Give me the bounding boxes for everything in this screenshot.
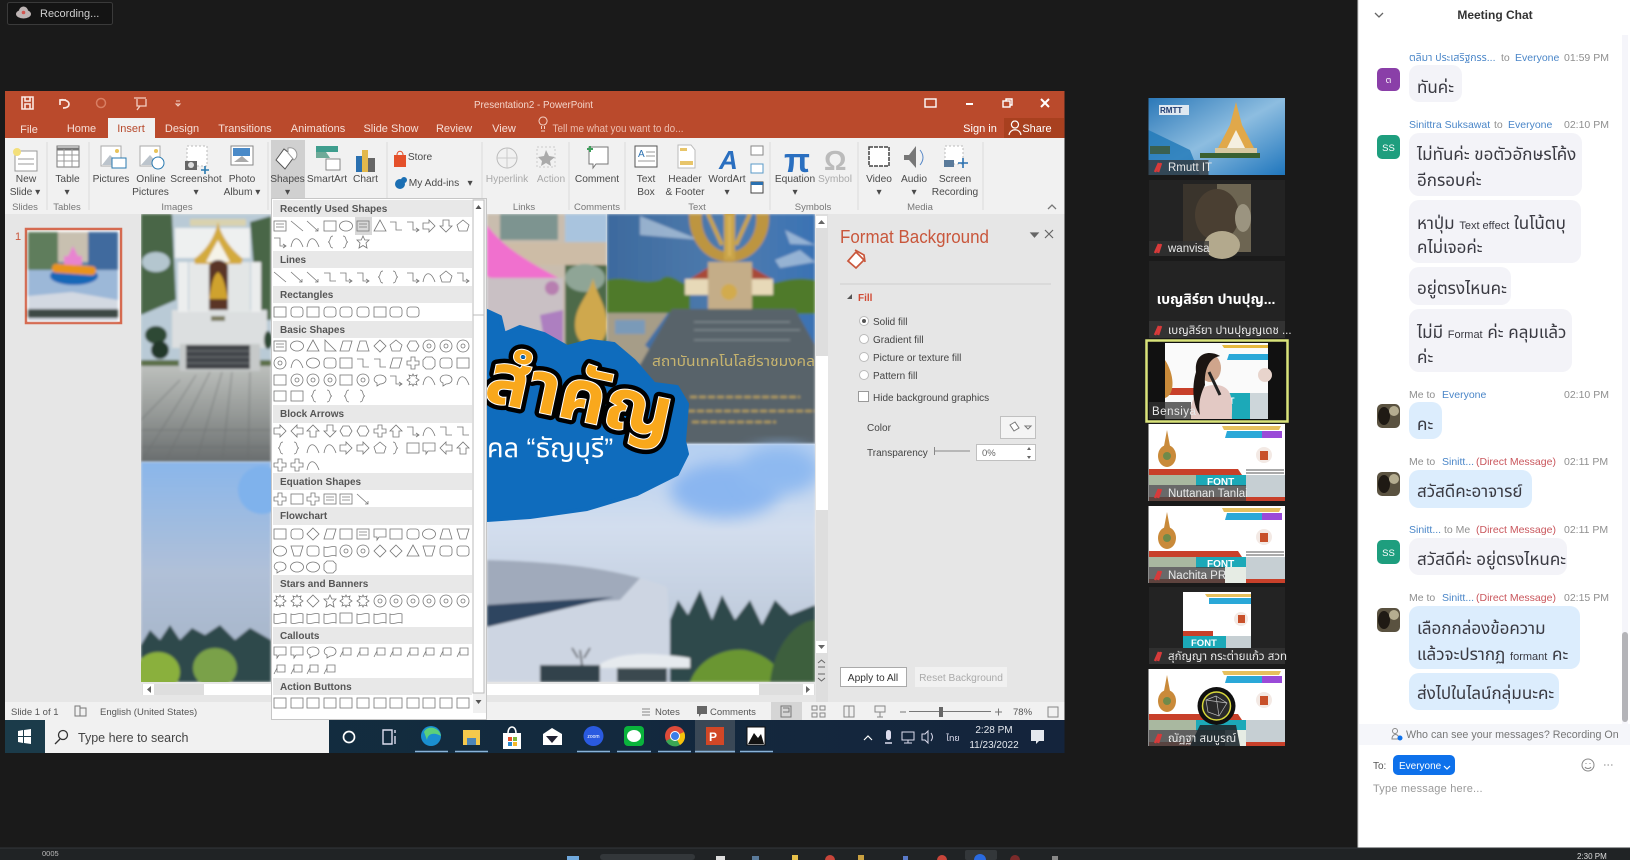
recording indicator xyxy=(8,2,112,24)
tile: small slide view: FONT xyxy=(1191,638,1217,649)
fill section: Fill xyxy=(858,293,873,304)
tile: active speaker Bensiya xyxy=(1146,340,1288,422)
button: Apply to All xyxy=(840,668,906,686)
status bar: English (United States) xyxy=(100,707,197,718)
ribbon group labels: Images xyxy=(161,202,193,213)
shapes gallery menu xyxy=(272,198,486,720)
ribbon labels: Recording xyxy=(932,187,979,198)
slide thumbnail: 1 xyxy=(15,231,21,243)
tile: participant name only xyxy=(1149,261,1292,338)
message 7: Sinitt... xyxy=(1442,456,1474,468)
message 6: 02:10 PM xyxy=(1564,389,1609,401)
message 7: (Direct Message) xyxy=(1476,456,1556,468)
ribbon labels: WordArt xyxy=(708,174,746,185)
title blob with heading: คล “ธัญบุรี” xyxy=(487,433,613,464)
Windows taskbar xyxy=(5,720,1064,753)
message 8: (Direct Message) xyxy=(1476,524,1556,536)
message 2: Sinittra Suksawat xyxy=(1409,119,1490,131)
message 1: to xyxy=(1501,52,1510,64)
status bar: Notes xyxy=(655,707,680,718)
tile: wanvisa: wanvisa xyxy=(1167,243,1210,255)
ribbon tabs: File xyxy=(20,124,38,136)
ribbon tabs: Home xyxy=(67,123,96,135)
title blob with heading: สำคัญ xyxy=(479,337,680,455)
system tray: 2:28 PM xyxy=(975,725,1013,736)
section: Equation Shapes: Equation Shapes xyxy=(280,477,362,488)
ribbon labels xyxy=(10,152,979,198)
ribbon icons: A xyxy=(718,145,738,175)
photo: sky and trees xyxy=(141,460,271,682)
ribbon labels: Text xyxy=(637,174,656,185)
panel: Meeting Chat xyxy=(1358,0,1630,848)
message 1 xyxy=(1377,52,1609,102)
message 9: 02:15 PM xyxy=(1564,592,1609,604)
tile: Nachita PR xyxy=(1148,506,1285,583)
ribbon labels: Shapes xyxy=(270,174,305,185)
message 1: 01:59 PM xyxy=(1564,52,1609,64)
tile: Rmutt IT: Rmutt IT xyxy=(1168,162,1212,174)
message 8: สวัสดีค่ะ อยู่ตรงไหนคะ xyxy=(1417,550,1566,571)
tile: Rmutt IT: RMTT xyxy=(1160,106,1182,115)
fill section: Pattern fill xyxy=(873,371,917,382)
tile: Nuttanan Tanlai: Nuttanan Tanlai xyxy=(1168,488,1248,500)
ribbon labels: ▾ xyxy=(193,187,199,198)
slide thumbnail xyxy=(15,229,121,323)
emoji and more xyxy=(1582,759,1612,771)
ribbon tabs: Share xyxy=(1022,123,1052,135)
ribbon labels: Screen xyxy=(939,174,971,185)
icon: slideshow xyxy=(134,98,146,110)
section: Callouts: Callouts xyxy=(280,631,320,642)
host desktop taskbar xyxy=(0,848,1630,860)
ribbon labels: New xyxy=(16,174,37,185)
taskbar apps: zoom xyxy=(587,734,600,740)
button: Reset Background xyxy=(915,667,1007,687)
message 1: ต xyxy=(1386,75,1391,85)
tile: Nuttanan Tanlai: FONT xyxy=(1207,477,1234,488)
ribbon labels: Symbol xyxy=(818,174,852,185)
message 5 xyxy=(1409,309,1572,372)
tile: Nuttanan Tanlai xyxy=(1148,424,1285,501)
message 8: 02:11 PM xyxy=(1564,524,1608,536)
ribbon labels: ▾ xyxy=(285,187,291,198)
ribbon labels: Comment xyxy=(575,174,619,185)
host desktop taskbar: 0005 xyxy=(42,849,59,858)
icon: undo xyxy=(60,100,69,108)
section: Stars and Banners xyxy=(273,575,472,624)
system tray: ไทย xyxy=(945,733,960,743)
system tray: 11/23/2022 xyxy=(969,740,1019,751)
message 1: Everyone xyxy=(1515,52,1560,64)
status bar xyxy=(5,702,1064,720)
icon: save xyxy=(22,97,33,109)
section: Block Arrows xyxy=(273,405,472,471)
section: Basic Shapes: Basic Shapes xyxy=(280,325,345,336)
message 8: to Me xyxy=(1444,524,1470,536)
tile: participant name only: เบญสิร์ยา ปานปุญ... xyxy=(1157,291,1275,308)
fill section: Picture or texture fill xyxy=(873,353,961,364)
ribbon tabs: View xyxy=(492,123,516,135)
message 2 xyxy=(1377,119,1609,196)
icon: cloud recording xyxy=(16,6,31,18)
ribbon labels: Online xyxy=(136,174,166,185)
message 8: Sinitt... xyxy=(1409,524,1441,536)
ribbon group labels xyxy=(12,202,1056,213)
tile: wanvisa xyxy=(1149,180,1285,259)
ribbon labels: Equation xyxy=(775,174,815,185)
tile: small slide view: สุกัญญา กระต่ายแก้ว สวท xyxy=(1168,649,1287,663)
message 6 xyxy=(1377,389,1609,439)
message 4: อยู่ตรงไหนคะ xyxy=(1417,279,1507,300)
section: Flowchart: Flowchart xyxy=(280,511,328,522)
ribbon icons: π xyxy=(784,142,810,180)
ribbon labels: Chart xyxy=(353,174,378,185)
ribbon tabs: Animations xyxy=(291,123,346,135)
message 7: Me to xyxy=(1409,456,1435,468)
section: Basic Shapes xyxy=(273,321,472,402)
ribbon labels: ▾ xyxy=(911,187,917,198)
ribbon tabs: Transitions xyxy=(218,123,272,135)
ribbon group labels: Slides xyxy=(12,202,38,213)
message 4 xyxy=(1409,267,1511,305)
tile: Rmutt IT xyxy=(1148,98,1285,175)
fill section: Color xyxy=(867,423,892,434)
photo: top right montage xyxy=(487,214,608,345)
recording indicator: Recording... xyxy=(40,8,99,20)
tile: participant name only: เบญสิร์ยา ปานปุญญเดช ... xyxy=(1168,325,1292,337)
ribbon labels: Box xyxy=(637,187,655,198)
ribbon tabs: Review xyxy=(436,123,472,135)
icon: muted mic xyxy=(1155,163,1161,172)
ribbon tabs: Insert xyxy=(117,123,145,135)
section: Callouts xyxy=(273,627,472,674)
ribbon labels: ▾ xyxy=(467,178,473,189)
ribbon group labels: Media xyxy=(907,202,934,213)
recipient selector xyxy=(1373,755,1455,775)
ribbon labels: Album ▾ xyxy=(224,187,261,198)
section: Action Buttons xyxy=(273,678,472,708)
taskbar apps xyxy=(344,720,765,753)
fill section xyxy=(847,293,1036,460)
message 7 xyxy=(1377,456,1608,508)
message 2: อีกรอบค่ะ xyxy=(1417,171,1482,190)
message 7: 02:11 PM xyxy=(1564,456,1608,468)
message 7: สวัสดีคะอาจารย์ xyxy=(1417,482,1523,501)
panel: participant videos xyxy=(1146,98,1292,746)
status bar: 78% xyxy=(1013,707,1033,718)
tile: Nachita PR: Nachita PR xyxy=(1168,570,1226,582)
tile: active speaker Bensiya: T xyxy=(1229,396,1235,406)
chat scrollbar xyxy=(1622,35,1628,724)
chat header: Meeting Chat xyxy=(1457,8,1533,22)
ribbon labels: ▾ xyxy=(792,187,798,198)
section: Stars and Banners: Stars and Banners xyxy=(280,579,369,590)
section: Flowchart xyxy=(273,507,472,573)
tile: active speaker Bensiya: Bensiya xyxy=(1152,406,1197,418)
message 9: แล้วจะปรากฏ formant คะ xyxy=(1417,644,1568,664)
ribbon labels: Video xyxy=(866,174,892,185)
ribbon labels: Pictures xyxy=(132,187,169,198)
icon: redo disabled xyxy=(96,98,106,108)
message 6: คะ xyxy=(1417,415,1433,434)
message 10: ส่งไปในไลน์กลุ่มนะคะ xyxy=(1417,684,1554,704)
ribbon labels: Action xyxy=(537,174,565,185)
tile: Nachita PR: FONT xyxy=(1207,559,1234,570)
ribbon tabs: Design xyxy=(165,123,199,135)
ribbon tabs: Slide Show xyxy=(363,123,419,135)
search box xyxy=(45,720,329,753)
panel: PowerPoint window xyxy=(5,91,1064,753)
vertical scrollbar xyxy=(816,214,828,702)
taskbar apps: P xyxy=(709,730,717,744)
ribbon tabs: Sign in xyxy=(963,123,997,135)
message 9: (Direct Message) xyxy=(1476,592,1556,604)
message 9 xyxy=(1377,592,1609,669)
message 1: ทันค่ะ xyxy=(1417,78,1454,97)
chat header xyxy=(1375,8,1533,22)
section: Lines: Lines xyxy=(280,255,307,266)
active tab: Insert xyxy=(108,118,155,139)
ribbon group labels: Links xyxy=(513,202,535,213)
section: Action Buttons: Action Buttons xyxy=(280,682,352,693)
section: Equation Shapes xyxy=(273,473,472,505)
message 9: เลือกกล่องข้อความ xyxy=(1417,618,1546,638)
fill section: Transparency xyxy=(867,448,928,459)
ribbon labels: & Footer xyxy=(665,187,705,198)
message 9: Me to xyxy=(1409,592,1435,604)
button: Reset Background: Reset Background xyxy=(919,673,1003,684)
message 2: Everyone xyxy=(1508,119,1553,131)
horizontal scrollbar xyxy=(142,684,815,695)
avatar: me xyxy=(1377,404,1400,428)
icon: customize xyxy=(176,101,180,106)
section: Lines xyxy=(273,251,472,283)
heading: Format Background xyxy=(840,227,989,247)
ribbon group labels: Comments xyxy=(574,202,620,213)
ribbon labels: SmartArt xyxy=(307,174,347,185)
ribbon labels: Header xyxy=(668,174,702,185)
message 2: to xyxy=(1494,119,1503,131)
message 5: ไม่มี Format ค่ะ คลุมแล้ว xyxy=(1416,322,1566,343)
message 3: หาปุ่ม Text effect ในโน้ตบุ xyxy=(1417,213,1566,234)
tile: slide view with avatar xyxy=(1148,669,1285,746)
message 9: Sinitt... xyxy=(1442,592,1474,604)
message 1: ตลิมา ประเสริฐกรร... xyxy=(1409,52,1496,64)
ribbon labels: Audio xyxy=(901,174,927,185)
photo: monument: สถาบันเทคโนโลยีราชมงคล xyxy=(652,353,815,369)
message 5: ค่ะ xyxy=(1417,348,1433,367)
tile: slide view with avatar: ณัฏฐา สมบูรณ์ xyxy=(1168,732,1236,745)
message 8: SS xyxy=(1382,548,1395,559)
tile: small slide view xyxy=(1149,587,1287,664)
fill section: 0% xyxy=(982,448,996,459)
message 3 xyxy=(1409,200,1581,263)
shapes button highlight xyxy=(271,140,305,198)
message 2: ไม่ทันค่ะ ขอตัวอักษรโค้ง xyxy=(1416,144,1576,164)
pane controls xyxy=(1031,230,1053,238)
avatar badge xyxy=(1198,687,1236,725)
title blob with heading xyxy=(479,311,687,520)
window controls xyxy=(925,99,1049,107)
fill section: Hide background graphics xyxy=(873,393,989,404)
section: Recently Used Shapes xyxy=(273,200,472,248)
ribbon icons: A xyxy=(638,149,645,160)
fill section: Solid fill xyxy=(873,317,907,328)
message input placeholder: Type message here... xyxy=(1373,783,1483,795)
ribbon labels: Table xyxy=(55,174,80,185)
ribbon labels: Pictures xyxy=(93,174,129,185)
fill section: Gradient fill xyxy=(873,335,924,346)
ribbon group labels: Symbols xyxy=(795,202,831,213)
photo: monument xyxy=(607,214,815,444)
system tray xyxy=(864,725,1044,751)
ribbon group labels: Tables xyxy=(53,202,81,213)
panel: Format Background xyxy=(829,214,1064,702)
ribbon labels: Slide ▾ xyxy=(10,187,41,198)
message 6: Everyone xyxy=(1442,389,1487,401)
status bar: Slide 1 of 1 xyxy=(11,707,59,718)
recipient selector: Everyone xyxy=(1399,761,1442,772)
icon: Windows logo xyxy=(18,729,31,744)
ribbon group labels: Text xyxy=(688,202,706,213)
ribbon labels: My Add-ins xyxy=(409,178,459,189)
search box: Type here to search xyxy=(78,731,189,745)
message 3: คไม่เจอค่ะ xyxy=(1417,238,1483,257)
message 8 xyxy=(1377,524,1608,575)
section: Recently Used Shapes: Recently Used Shapes xyxy=(280,204,388,215)
section: Rectangles xyxy=(273,286,472,317)
title bar xyxy=(5,91,1064,139)
work area xyxy=(5,214,1064,702)
ribbon xyxy=(5,138,1064,214)
ribbon labels: ▾ xyxy=(64,187,70,198)
message 6: Me to xyxy=(1409,389,1435,401)
button: Apply to All: Apply to All xyxy=(848,673,898,684)
ribbon labels: Photo xyxy=(229,174,256,185)
ribbon tabs: Tell me what you want to do... xyxy=(552,123,684,135)
ribbon icons xyxy=(13,142,968,193)
recording notice: Who can see your messages? Recording On xyxy=(1406,729,1619,741)
recipient selector: To: xyxy=(1373,761,1386,772)
photo: white shrine xyxy=(141,214,271,682)
ribbon labels: ▾ xyxy=(724,187,730,198)
ribbon labels: ▾ xyxy=(876,187,882,198)
title blob with heading: สำคัญ xyxy=(479,337,680,455)
section: Rectangles: Rectangles xyxy=(280,290,334,301)
ribbon labels: Store xyxy=(408,152,433,163)
ribbon tabs xyxy=(20,117,1064,138)
taskbar underlines xyxy=(415,750,773,752)
photo: building and sky xyxy=(487,444,820,682)
message 2: SS xyxy=(1382,143,1395,154)
section: Block Arrows: Block Arrows xyxy=(280,409,345,420)
ribbon labels: Screenshot xyxy=(170,174,222,185)
ribbon labels: Hyperlink xyxy=(486,174,529,185)
icon: paint bucket xyxy=(848,250,865,268)
ribbon icons: Ω xyxy=(824,145,846,176)
slide canvas xyxy=(136,214,820,692)
message 10 xyxy=(1409,673,1559,710)
document title: Presentation2 - PowerPoint xyxy=(474,99,593,111)
message 2: 02:10 PM xyxy=(1564,119,1609,131)
recording notice xyxy=(1359,724,1630,745)
status bar: Comments xyxy=(710,707,756,718)
